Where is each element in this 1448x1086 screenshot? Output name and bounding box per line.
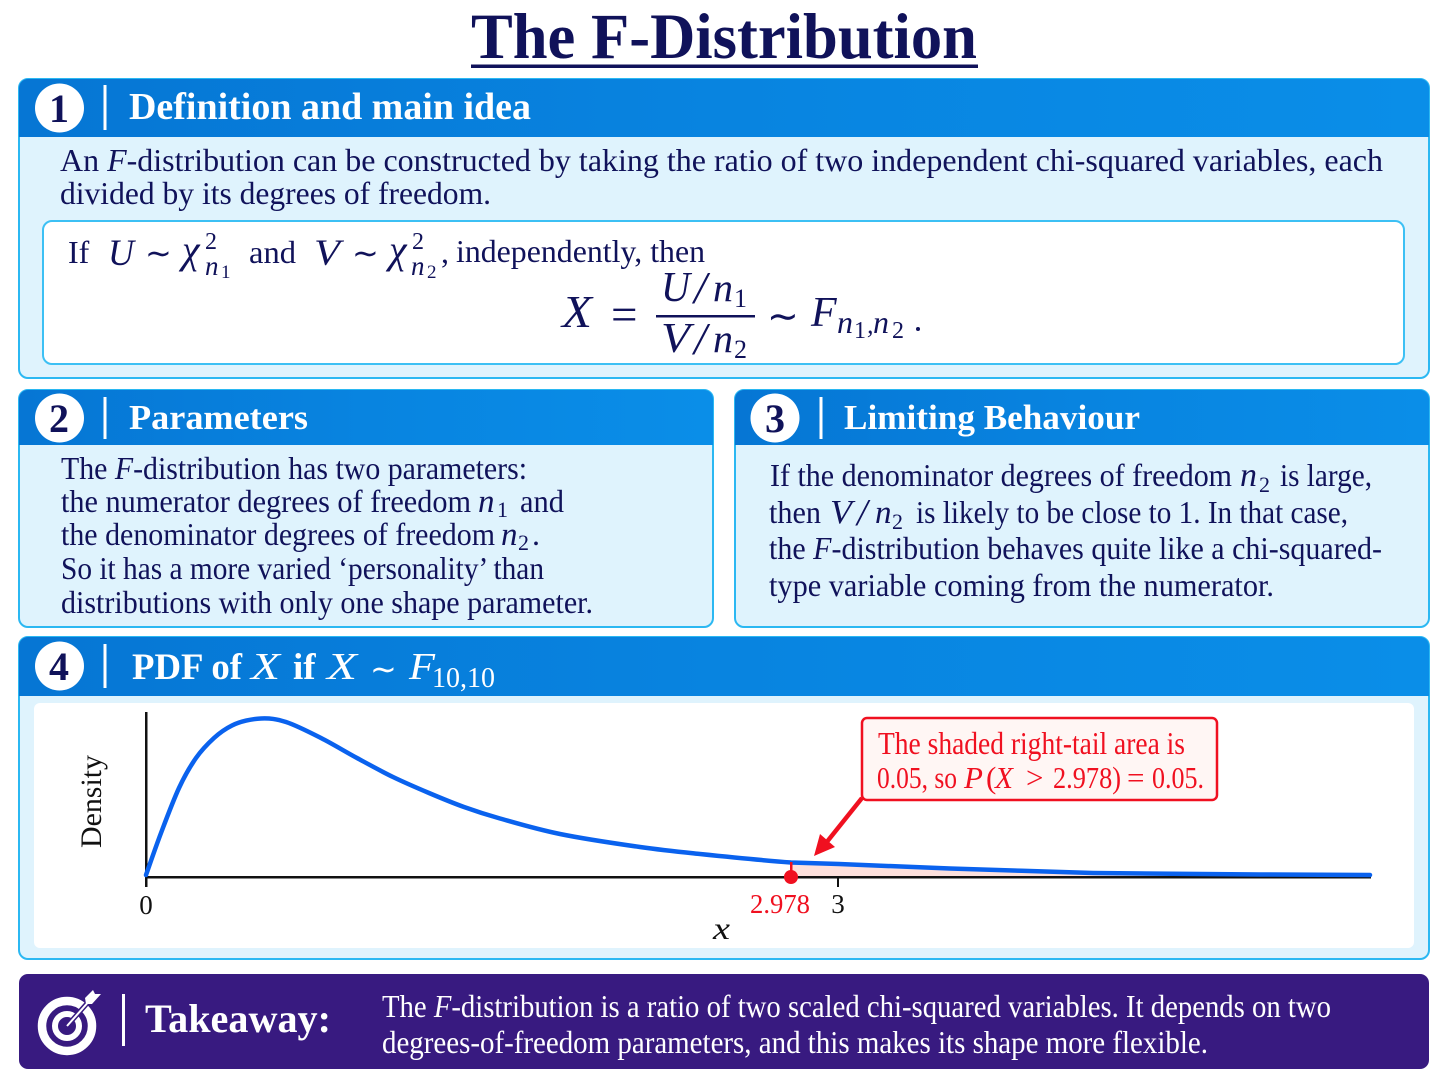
formula box: If [68, 234, 90, 270]
callout: = [1127, 760, 1144, 795]
limiting behaviour text: n [875, 495, 892, 531]
formula box: χ [178, 227, 201, 272]
chart area [34, 703, 1414, 948]
panel 3: limiting behaviour [735, 390, 1429, 627]
formula box: n [205, 251, 218, 281]
limiting behaviour text: is likely to be close to 1. In that case, [916, 494, 1348, 530]
axes [145, 712, 1371, 887]
parameters text: distributions with only one shape parameter. [61, 584, 593, 620]
parameters text: the numerator degrees of freedom [61, 483, 471, 519]
callout arrow [814, 798, 862, 856]
parameters text: n [501, 517, 518, 553]
limiting behaviour text: 2 [1259, 472, 1270, 497]
takeaway label: Takeaway: [145, 996, 331, 1041]
parameters text: and [520, 483, 564, 519]
fraction formula: / [691, 262, 711, 313]
axis tick labels: 0 [139, 890, 153, 920]
formula box: V [314, 233, 345, 274]
formula box: 2 [412, 229, 424, 255]
formula box: 2 [427, 262, 436, 283]
fraction formula: V [661, 316, 695, 362]
definition text: An F-distribution can be constructed by taking the ratio of two independent chi-squared variables, each [60, 142, 1383, 178]
critical value marker [784, 862, 798, 884]
limiting behaviour text: n [1240, 457, 1257, 494]
limiting behaviour text: If the denominator degrees of freedom [770, 457, 1232, 493]
limiting behaviour text: then [769, 494, 821, 530]
panel 2: parameters [19, 390, 713, 627]
callout: > [1026, 760, 1043, 795]
fraction formula: ∼ [767, 296, 799, 338]
fraction formula: n [837, 304, 853, 340]
takeaway text: The F-distribution is a ratio of two scaled chi-squared variables. It depends on two [382, 988, 1331, 1024]
takeaway text [382, 988, 1331, 1060]
fraction formula: 1 [734, 284, 747, 313]
header bar 4: if [293, 647, 316, 688]
header bar 1 [19, 79, 1429, 137]
header bar 4: X [324, 646, 359, 688]
parameters text: So it has a more varied ‘personality’ than [61, 550, 544, 586]
parameters text: . [532, 516, 540, 552]
header bar 4 [19, 637, 1429, 696]
limiting behaviour text [769, 457, 1382, 603]
fraction formula: , [867, 310, 874, 339]
parameters text: 2 [518, 530, 529, 555]
formula box: 2 [205, 229, 217, 255]
callout: 0.05. [1152, 760, 1204, 795]
header bar 4: 4 [49, 644, 69, 689]
limiting behaviour text: 2 [892, 509, 903, 534]
fraction formula: 2 [734, 335, 747, 364]
y axis label: Density [75, 755, 108, 848]
panel 1: definition and main idea [19, 79, 1429, 378]
callout: The shaded right-tail area is [878, 725, 1185, 761]
fraction formula: n [713, 316, 733, 361]
limiting behaviour text: type variable coming from the numerator. [769, 567, 1274, 603]
callout: ( [986, 760, 996, 795]
header bar 1: Definition and main idea [129, 86, 531, 128]
formula box: independently, then [456, 233, 705, 269]
limiting behaviour text: V [830, 494, 856, 531]
fraction formula: 1 [854, 318, 866, 344]
axis tick labels: x [712, 910, 730, 946]
fraction formula: / [691, 313, 711, 364]
header bar 3 [735, 390, 1429, 445]
formula box: ∼ [352, 235, 379, 271]
callout: X [993, 760, 1014, 795]
parameters text [61, 450, 593, 620]
formula box: 1 [221, 262, 230, 283]
definition text [60, 142, 1383, 211]
header bar 4: PDF of [132, 647, 243, 688]
fraction formula: n [873, 304, 889, 340]
header bar 4: ∼ [370, 651, 397, 687]
formula box: , [441, 234, 449, 270]
fraction formula: U [661, 265, 693, 311]
limiting behaviour text: is large, [1280, 457, 1372, 493]
header bar 4: 10,10 [432, 662, 495, 694]
header bar 2 [19, 390, 713, 445]
header bar 1: 1 [49, 86, 69, 131]
callout: P [963, 760, 983, 795]
parameters text: The F-distribution has two parameters: [61, 450, 527, 486]
parameters text: the denominator degrees of freedom [61, 516, 495, 552]
density curve [146, 718, 1370, 875]
header bar 4: F [408, 646, 436, 688]
fraction formula: n [713, 265, 733, 310]
header bar 4: X [249, 646, 282, 688]
fraction formula: = [611, 289, 638, 341]
shaded right tail [791, 862, 1370, 877]
fraction formula: F [810, 290, 837, 336]
icon: target with arrow [42, 990, 101, 1051]
axis tick labels [139, 889, 845, 946]
header bar 2: 2 [49, 396, 69, 441]
limiting behaviour text: the F-distribution behaves quite like a chi-squared- [769, 530, 1382, 566]
callout: 2.978) [1053, 760, 1121, 795]
callout [862, 718, 1217, 800]
takeaway banner [19, 974, 1429, 1069]
title: The F-Distribution [471, 1, 977, 73]
formula box [43, 221, 1404, 364]
definition text: divided by its degrees of freedom. [60, 175, 491, 211]
parameters text: 1 [497, 497, 508, 522]
formula box: χ [385, 227, 408, 272]
formula box: and [249, 234, 296, 270]
formula box: U [108, 233, 136, 274]
limiting behaviour text: / [855, 492, 871, 534]
header bar 2: Parameters [129, 398, 308, 437]
panel 4: PDF chart [19, 637, 1429, 959]
takeaway text: degrees-of-freedom parameters, and this makes its shape more flexible. [382, 1024, 1208, 1060]
formula box: n [411, 251, 424, 281]
fraction formula: 2 [892, 318, 904, 344]
axis tick labels: 2.978 [750, 889, 810, 919]
formula box: ∼ [145, 235, 172, 271]
fraction formula: X [560, 286, 594, 337]
header bar 3: 3 [765, 396, 785, 441]
header bar 3: Limiting Behaviour [844, 398, 1140, 437]
callout: 0.05, so [877, 760, 957, 795]
axis tick labels: 3 [831, 889, 845, 919]
fraction formula [560, 262, 920, 364]
parameters text: n [478, 484, 494, 520]
